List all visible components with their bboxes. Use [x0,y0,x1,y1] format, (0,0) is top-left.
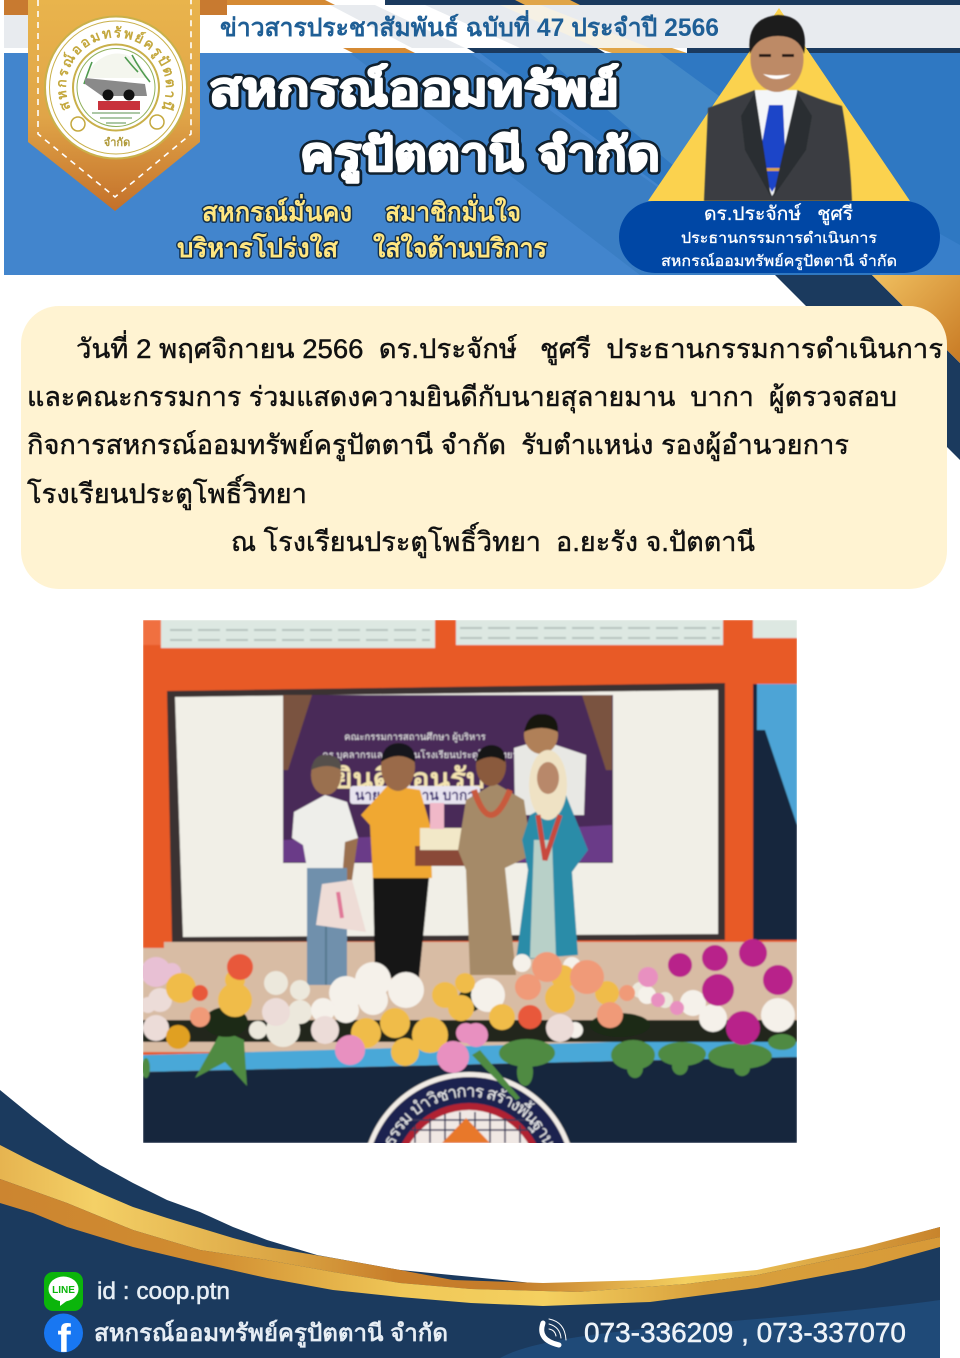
slogans: สมาชิกมั่นใจ [385,193,521,227]
slogans [177,193,547,263]
name pill [619,201,940,273]
line icon [44,1272,83,1311]
flower arrangement [140,939,796,1100]
right diagonal decoration [775,275,960,460]
woman in teal dress [516,750,588,960]
event photo: นายสุลายมาน บากา [355,787,475,804]
name pill: ดร.ประจักษ์ ชูศรี [704,203,853,225]
news text panel: โรงเรียนประตูโพธิ์วิทยา [27,474,307,510]
header top stripes [4,0,960,53]
news text panel: กิจการสหกรณ์ออมทรัพย์ครูปัตตานี จำกัด รับตำแหน่ง รองผู้อำนวยการ [27,429,849,461]
man in khaki uniform [458,745,532,975]
main title: สหกรณ์ออมทรัพย์ [209,63,619,115]
emblem on stage: ธรรม บำวิชาการ สร้างพื้นฐาน [384,1086,554,1143]
facebook page name: สหกรณ์ออมทรัพย์ครูปัตตานี จำกัด [94,1319,448,1348]
man in white polo [292,755,366,985]
event photo: ยินดีต้อนรับ [334,763,485,794]
news text panel: และคณะกรรมการ ร่วมแสดงความยินดีกับนายสุลายมาน บากา ผู้ตรวจสอบ [27,382,897,414]
seal logo: จำกัด [104,136,130,149]
icon: telephone [542,1319,566,1345]
news text panel: ณ โรงเรียนประตูโพธิ์วิทยา อ.ยะรัง จ.ปัตตานี [231,522,755,558]
line id text: id : coop.ptn [97,1278,230,1305]
event photo: ครู บุคลากรและนักเรียนโรงเรียนประตูโพธิ์วิทยา [322,747,518,761]
seal logo [44,16,188,160]
main title: สหกรณ์ออมทรัพย์ [209,63,619,115]
news text panel: วันที่ 2 พฤศจิกายน 2566 ดร.ประจักษ์ ชูศรี ประธานกรรมการดำเนินการ [76,330,943,365]
gift basket [414,802,466,867]
slogans: สหกรณ์มั่นคง [202,193,352,227]
news text panel [21,306,947,589]
newsletter issue heading: ข่าวสารประชาสัมพันธ์ ฉบับที่ 47 ประจำปี 2566 [220,10,719,42]
phone numbers: 073-336209 , 073-337070 [584,1317,906,1348]
header blue band [4,53,960,275]
footer lighter navy panel [500,1300,940,1358]
chairman portrait [648,8,910,201]
name pill: สหกรณ์ออมทรัพย์ครูปัตตานี จำกัด [661,253,897,270]
footer navy wave [0,1090,940,1358]
main title [209,63,660,183]
event photo: คณะกรรมการสถานศึกษา ผู้บริหาร [344,732,486,743]
facebook icon [44,1314,83,1358]
gold ribbon with seal [28,0,200,211]
line icon: LINE [52,1285,75,1296]
name pill: ประธานกรรมการดำเนินการ [681,230,877,247]
man in yellow shirt [361,743,432,978]
emblem on stage [366,1061,604,1326]
slogans: ใส่ใจด้านบริการ [373,233,547,263]
footer gold swoosh [0,1145,940,1306]
main title: ครูปัตตานี จำกัด [300,128,660,183]
event photo [143,620,797,1143]
seal logo: สหกรณ์ออมทรัพย์ครูปัตตานี [58,26,174,111]
main title: ครูปัตตานี จำกัด [300,128,660,183]
slogans: บริหารโปร่งใส [177,232,338,263]
ribbon ears [4,0,227,15]
